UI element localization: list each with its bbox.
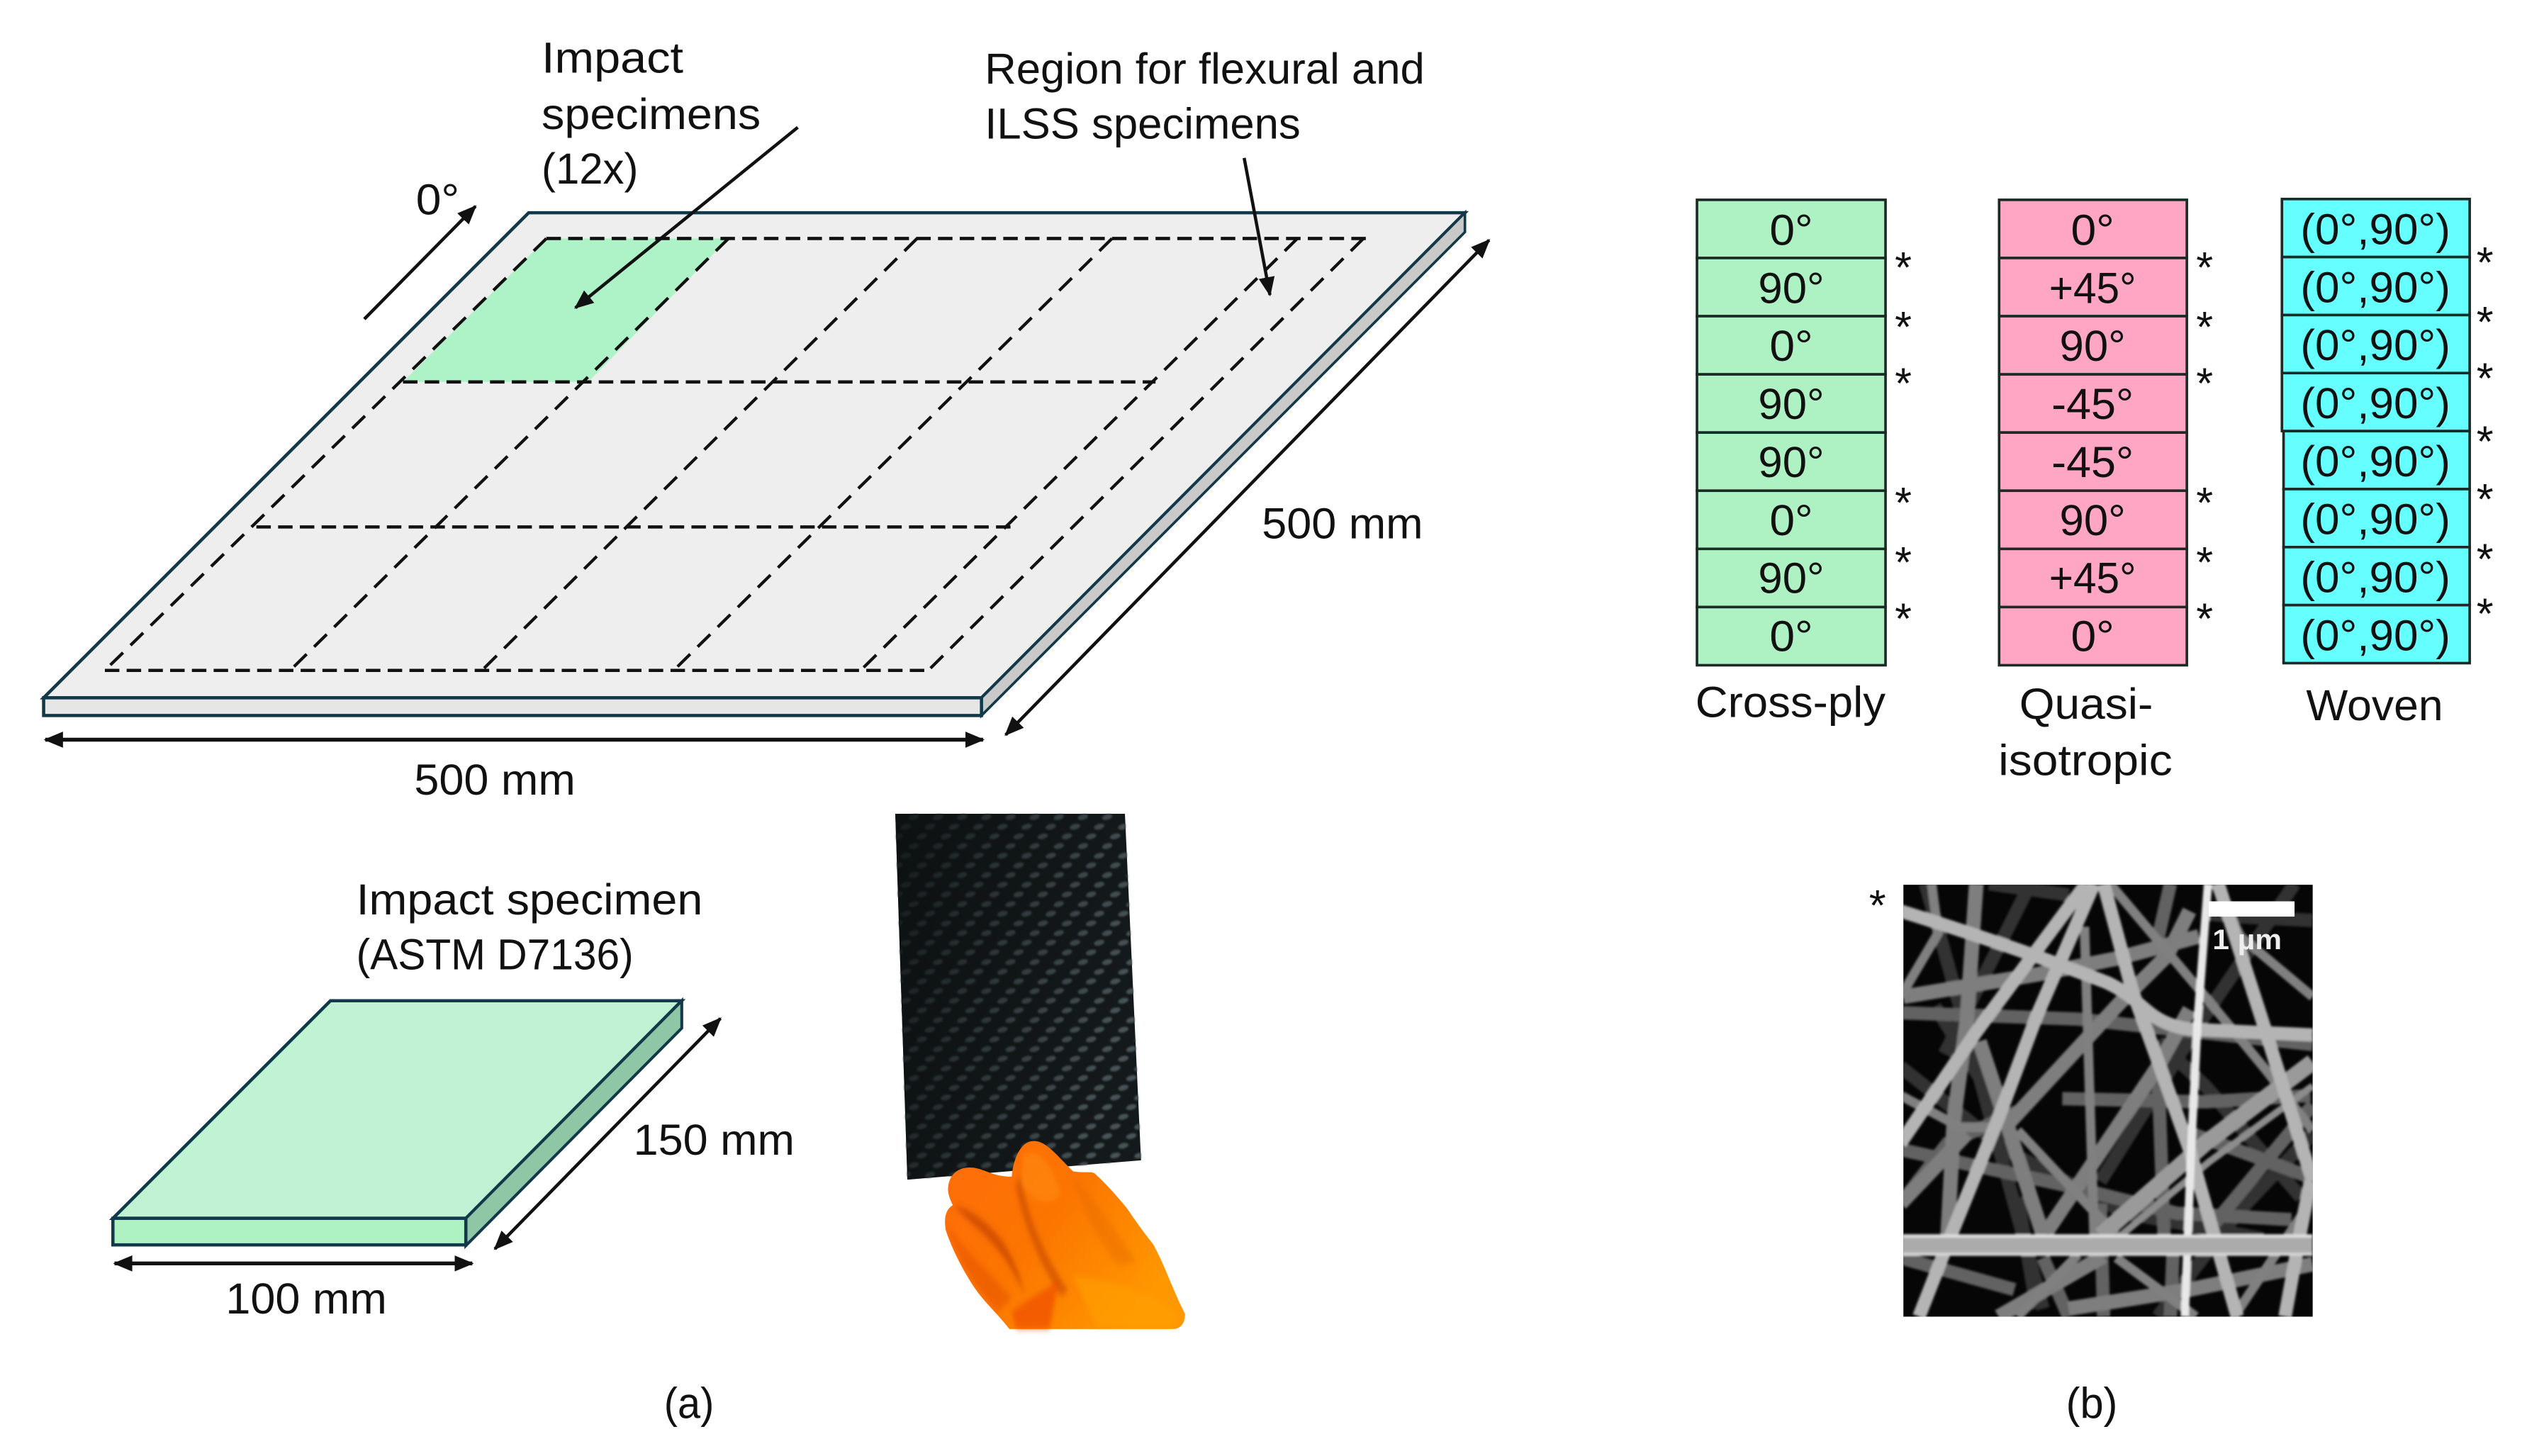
label: impact specimen standard: (ASTM D7136) bbox=[357, 930, 634, 979]
ply 4: (0°,90°) bbox=[2300, 379, 2450, 428]
ply 6: 90° bbox=[2060, 496, 2126, 545]
nanofibre interface markers: cross-ply: * bbox=[1895, 303, 1912, 352]
laminate plate bbox=[44, 213, 1465, 715]
panel: (a) manufacturing plate and impact specimen bbox=[44, 33, 1489, 1428]
label: flexural region: Region for flexural and bbox=[985, 45, 1425, 94]
foreground fibres bbox=[1900, 884, 2313, 1316]
nanofibre interface markers: cross-ply: * bbox=[1895, 538, 1912, 587]
ply 7: (0°,90°) bbox=[2300, 553, 2450, 602]
nanofibre interface markers: woven: * bbox=[2477, 590, 2494, 639]
glove folds bbox=[948, 1153, 1179, 1329]
label: 0 degrees: 0° bbox=[416, 175, 459, 224]
ply 2: 90° bbox=[1758, 264, 1825, 313]
ply 8 bbox=[1999, 607, 2187, 665]
impact specimen block bbox=[113, 1001, 682, 1245]
ply 4: -45° bbox=[2051, 380, 2134, 429]
nanofibre interface markers: quasi-isotropic: * bbox=[2196, 594, 2213, 643]
ply 1 bbox=[1999, 200, 2187, 258]
ply 4 bbox=[2282, 373, 2470, 431]
nanofibre interface markers: cross-ply: * bbox=[1895, 359, 1912, 408]
ply 6: 0° bbox=[1769, 496, 1813, 545]
ply 2: +45° bbox=[2049, 264, 2136, 313]
ply 6 bbox=[2284, 489, 2470, 547]
nanofibre interface markers: woven: * bbox=[2477, 534, 2494, 583]
label: cross-ply: Cross-ply bbox=[1696, 678, 1886, 727]
ply 7: 90° bbox=[1758, 554, 1825, 603]
nanofibre interface markers: woven: * bbox=[2477, 238, 2494, 287]
nanofibre interface markers: quasi-isotropic: * bbox=[2196, 303, 2213, 352]
ply 8 bbox=[2284, 605, 2470, 663]
label: impact specimens: specimens bbox=[542, 90, 761, 139]
nanofibre interface markers: woven: * bbox=[2477, 298, 2494, 347]
ply 4 bbox=[1697, 374, 1886, 432]
caption: (a): (a) bbox=[664, 1379, 714, 1428]
ply 4: 90° bbox=[1758, 380, 1825, 429]
label: flexural region: ILSS specimens bbox=[985, 100, 1301, 149]
arrow: 0 degree direction bbox=[364, 206, 476, 319]
ply 5 bbox=[2284, 431, 2470, 489]
deep fibres bbox=[1900, 884, 2313, 1316]
ply 3 bbox=[1697, 316, 1886, 374]
ply 2 bbox=[2282, 257, 2470, 315]
ply 5 bbox=[1999, 432, 2187, 491]
ply 8 bbox=[1697, 607, 1886, 665]
arrow: plate depth dimension bbox=[1006, 240, 1489, 735]
ply 6 bbox=[1697, 491, 1886, 549]
label: impact specimens: Impact bbox=[542, 33, 683, 82]
arrow: impact specimens pointer bbox=[576, 128, 797, 308]
ply 8: (0°,90°) bbox=[2300, 611, 2450, 660]
ply 5: 90° bbox=[1758, 438, 1825, 487]
scale bar bbox=[2209, 902, 2295, 917]
label: plate width: 500 mm bbox=[414, 756, 576, 805]
label: plate depth: 500 mm bbox=[1262, 499, 1423, 548]
nanofibre interface markers: woven: * bbox=[2477, 475, 2494, 524]
arrow: specimen length bbox=[495, 1019, 720, 1249]
ply 5: -45° bbox=[2051, 438, 2134, 487]
ply 1 bbox=[1697, 200, 1886, 258]
ply 4 bbox=[1999, 374, 2187, 432]
stack: woven bbox=[2282, 199, 2470, 663]
arrow: plate width dimension bbox=[45, 739, 983, 741]
nanofibre interface markers: cross-ply: * bbox=[1895, 594, 1912, 643]
ply 5: (0°,90°) bbox=[2300, 437, 2450, 486]
ply 2 bbox=[1697, 258, 1886, 316]
label: specimen width: 100 mm bbox=[225, 1275, 387, 1323]
ply 3: 0° bbox=[1769, 322, 1813, 371]
panel: (b) stacking sequences bbox=[1696, 199, 2494, 1428]
ply 1: 0° bbox=[2071, 206, 2114, 255]
micrograph: electrospun nanofibres bbox=[1900, 884, 2313, 1316]
nanofibre interface markers: woven: * bbox=[2477, 417, 2494, 466]
label: quasi-isotropic: isotropic bbox=[1998, 736, 2173, 785]
label: quasi-isotropic: Quasi- bbox=[2019, 680, 2153, 729]
ply 1: 0° bbox=[1769, 206, 1813, 255]
label: impact specimens: (12x) bbox=[542, 145, 638, 194]
photo: carbon fibre specimen bbox=[895, 814, 1141, 1180]
ply 3: 90° bbox=[2060, 322, 2126, 371]
scale bar label: 1 µm bbox=[2212, 924, 2282, 956]
ply 6 bbox=[1999, 491, 2187, 549]
ply 3: (0°,90°) bbox=[2300, 321, 2450, 370]
ply 7 bbox=[1697, 549, 1886, 607]
label: impact specimen standard: Impact specimen bbox=[357, 875, 702, 924]
nanofibre interface markers: quasi-isotropic: * bbox=[2196, 538, 2213, 587]
nanofibre interface markers: quasi-isotropic: * bbox=[2196, 243, 2213, 292]
ply 2: (0°,90°) bbox=[2300, 263, 2450, 312]
nanofibre interface markers: quasi-isotropic: * bbox=[2196, 359, 2213, 408]
nanofibre marker beside micrograph: * bbox=[1869, 881, 1886, 930]
label: woven: Woven bbox=[2306, 681, 2443, 730]
stack: quasi-isotropic bbox=[1999, 200, 2187, 665]
ply 7 bbox=[1999, 549, 2187, 607]
stack: cross-ply bbox=[1697, 200, 1886, 665]
caption: (b): (b) bbox=[2066, 1379, 2117, 1428]
ply 6: (0°,90°) bbox=[2300, 495, 2450, 544]
ply 1: (0°,90°) bbox=[2300, 205, 2450, 254]
label: specimen length: 150 mm bbox=[634, 1116, 795, 1165]
dashed cutting layout bbox=[105, 238, 1367, 671]
arrow: flexural region pointer bbox=[1244, 158, 1270, 295]
ply 8: 0° bbox=[2071, 612, 2114, 661]
ply 1 bbox=[2282, 199, 2470, 257]
ply 3 bbox=[2282, 315, 2470, 373]
ply 3 bbox=[1999, 316, 2187, 374]
photo: orange gloved hand bbox=[945, 1141, 1185, 1329]
nanofibre interface markers: woven: * bbox=[2477, 354, 2494, 403]
highlighted impact specimen region bbox=[403, 238, 729, 382]
ply 7 bbox=[2284, 547, 2470, 605]
ply 7: +45° bbox=[2049, 554, 2136, 603]
ply 5 bbox=[1697, 432, 1886, 491]
nanofibre interface markers: cross-ply: * bbox=[1895, 478, 1912, 527]
arrow: specimen width bbox=[115, 1262, 472, 1265]
ply 2 bbox=[1999, 258, 2187, 316]
ply 8: 0° bbox=[1769, 612, 1813, 661]
nanofibre interface markers: quasi-isotropic: * bbox=[2196, 478, 2213, 527]
nanofibre interface markers: cross-ply: * bbox=[1895, 243, 1912, 292]
